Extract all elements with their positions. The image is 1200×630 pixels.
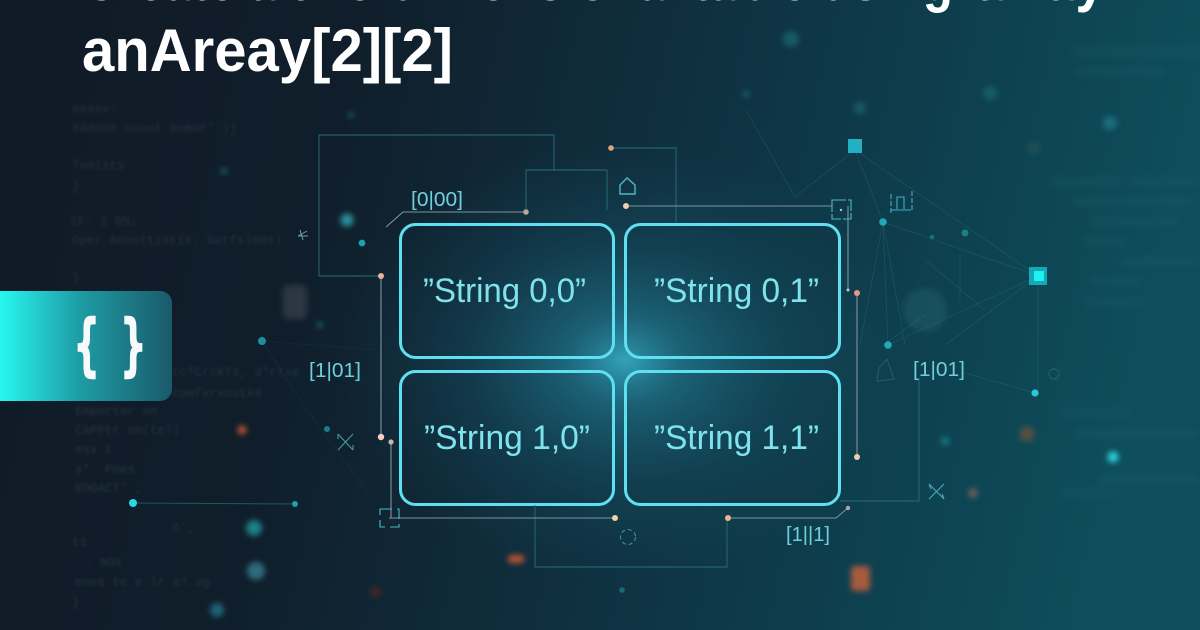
title: anAreay[2][2] bbox=[82, 17, 453, 84]
icon: cross left bbox=[338, 434, 353, 450]
blurred code text: left: comfxrxoutk0 bbox=[172, 387, 262, 401]
cell 1,1: ”String 1,1” bbox=[654, 419, 819, 457]
cell 1,1 bbox=[626, 372, 840, 504]
index labels: [1|01] bbox=[309, 360, 361, 382]
title bbox=[82, 0, 1106, 84]
blurred code bars: right bbox=[1050, 48, 1200, 496]
connector lines bbox=[319, 135, 919, 567]
blurred code text: left: } bbox=[72, 180, 80, 194]
icon: cross right bbox=[929, 484, 944, 499]
blurred code text: left: O', bbox=[172, 522, 195, 536]
blurred code text: left: Emportor on bbox=[75, 405, 158, 419]
blurred code text: left: t1 bbox=[72, 536, 87, 550]
blurred code text: left: enes te e lr a?.og bbox=[75, 576, 210, 590]
index labels: [1|01] bbox=[913, 359, 965, 381]
index labels: [0|00] bbox=[411, 189, 463, 211]
icon: focus square bottom left bbox=[380, 509, 399, 527]
side tag with braces bbox=[0, 291, 172, 401]
network: right nodes and links bbox=[258, 110, 1059, 432]
blurred code text: left: a* .Poes bbox=[75, 463, 135, 477]
blurred code text: left: ROOACT' , bbox=[75, 482, 143, 496]
icon: dashed bracket device bbox=[891, 191, 912, 214]
cell 0,0: ”String 0,0” bbox=[423, 272, 586, 310]
icon: dashed circle bbox=[620, 530, 636, 544]
blurred code text: left: CAPPtr on(te7) bbox=[75, 424, 180, 438]
cell 1,0: ”String 1,0” bbox=[424, 419, 590, 457]
index labels: [1||1] bbox=[786, 524, 830, 546]
cell 0,1 bbox=[626, 224, 840, 358]
cell 0,1: ”String 0,1” bbox=[654, 272, 819, 310]
blurred code text: left: } bbox=[72, 271, 80, 285]
side tag with braces: { } bbox=[75, 306, 145, 383]
icon: bright square node right bbox=[1029, 267, 1047, 285]
network dots bbox=[258, 218, 1039, 432]
icon: square node top bbox=[848, 139, 862, 153]
array cells bbox=[400, 224, 840, 504]
blurred code text: left: . mOs bbox=[85, 556, 123, 570]
left link with dots bbox=[129, 341, 375, 507]
index labels bbox=[309, 189, 965, 546]
faint pentagon and ring bbox=[877, 359, 1059, 381]
icon: focus square top right bbox=[832, 200, 851, 219]
lower dot bbox=[619, 587, 625, 593]
blurred code text: left bbox=[70, 103, 300, 610]
blurred code text: left: ccTCrcKTs, d*rtxe bbox=[172, 366, 300, 380]
blurred code text: left: } bbox=[72, 596, 80, 610]
blurred code text: left: IF: 1 0%; bbox=[70, 215, 138, 229]
blurred code text: left: #####: bbox=[72, 103, 117, 117]
icon: house bbox=[620, 178, 635, 194]
icon: small glyph left bbox=[298, 230, 308, 240]
cell 1,0 bbox=[400, 372, 614, 504]
blurred code text: left: Toolsts bbox=[72, 159, 125, 173]
blurred code text: left: ###### ccout axmor' }j bbox=[72, 122, 237, 136]
connector end dots bbox=[378, 145, 860, 521]
small line icons bbox=[298, 178, 944, 544]
blurred code text: left: esv t bbox=[75, 443, 113, 457]
blurred code text: left: Oper Annottistix. Gatfsl00s) bbox=[72, 234, 282, 248]
blurred background dots bbox=[210, 31, 1118, 617]
cell 0,0 bbox=[400, 224, 614, 358]
